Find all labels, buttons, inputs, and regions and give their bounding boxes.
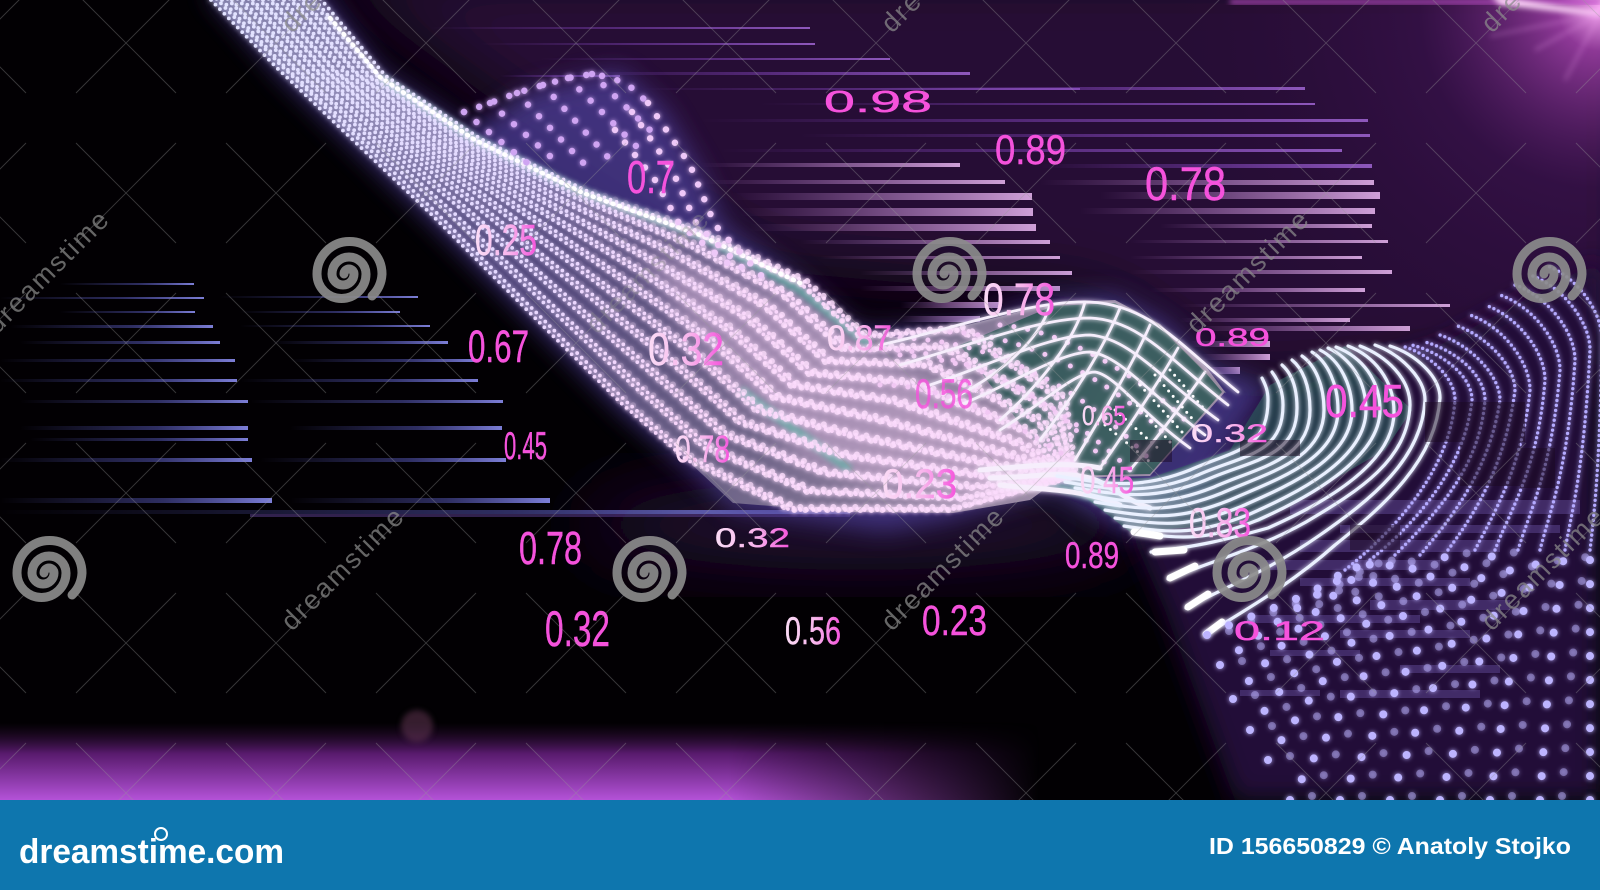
footer banner bbox=[0, 800, 1600, 890]
purple haze upper right bbox=[300, 0, 1600, 400]
ribbon upper edge bright line bbox=[330, 18, 800, 283]
value 0.65 faint: 0.65 bbox=[1082, 400, 1126, 431]
ribbon teal edge bbox=[380, 78, 1120, 505]
value 0.89 small: 0.89 bbox=[1195, 324, 1270, 352]
bottom purple glow bbox=[0, 710, 1040, 800]
value 0.32 under ribbon: 0.32 bbox=[715, 523, 790, 553]
value 0.83: 0.83 bbox=[1189, 499, 1251, 546]
right fan solid arcs bbox=[1057, 345, 1440, 635]
ribbon glow halo bbox=[205, 0, 1270, 535]
value 0.45 large: 0.45 bbox=[1325, 375, 1404, 427]
value 0.67: 0.67 bbox=[468, 321, 529, 372]
ribbon body fill bbox=[211, 0, 1225, 513]
value 0.87 on ribbon: 0.87 bbox=[827, 319, 892, 358]
value 0.78 lower: 0.78 bbox=[519, 522, 582, 574]
footer credit: ID 156650829 © Anatoly Stojko bbox=[1209, 833, 1571, 859]
right fan bright tips bbox=[1134, 532, 1222, 634]
data values bbox=[468, 84, 1404, 657]
value 0.23 lower: 0.23 bbox=[922, 597, 987, 645]
value 0.7: 0.7 bbox=[627, 151, 675, 203]
mesh small white dots bbox=[1105, 370, 1205, 462]
mesh wave pink dotted lines bbox=[870, 325, 1190, 472]
value 0.89 lower: 0.89 bbox=[1065, 535, 1119, 576]
value 0.32 right: 0.32 bbox=[1191, 420, 1268, 448]
purple haze beneath ribbon bbox=[580, 480, 1140, 570]
watermark text bbox=[0, 0, 1600, 636]
footer logo: dreamstime.com bbox=[19, 833, 284, 871]
value 0.32 middle: 0.32 bbox=[648, 323, 724, 375]
watermark text: dreamstime bbox=[275, 502, 409, 636]
right fan upper fine lines bbox=[1345, 265, 1600, 570]
dotted upper lobe bbox=[464, 74, 770, 285]
ribbon dotted strands bbox=[211, 0, 1076, 510]
watermark text: dreamstime bbox=[1180, 205, 1314, 339]
upper right data bars bbox=[430, 27, 1450, 374]
mesh teal tone bbox=[960, 303, 1222, 476]
fan teal tone bbox=[1060, 346, 1412, 532]
left blue data bars bbox=[0, 283, 850, 517]
ribbon bright central dots bbox=[574, 180, 1081, 516]
value 0.78 top: 0.78 bbox=[1145, 157, 1226, 210]
watermark spirals bbox=[17, 242, 1582, 598]
dark field behind right fan bbox=[1130, 260, 1600, 800]
value 0.23 on ribbon: 0.23 bbox=[882, 460, 957, 507]
lens flare top right bbox=[1100, 0, 1600, 420]
value 0.56 lower: 0.56 bbox=[785, 610, 841, 653]
ribbon central bright core bbox=[640, 250, 1080, 490]
value 0.45 left: 0.45 bbox=[504, 425, 547, 468]
watermark text: dreamstime bbox=[875, 502, 1009, 636]
value 0.12: 0.12 bbox=[1234, 616, 1325, 646]
value 0.78 on ribbon: 0.78 bbox=[675, 429, 730, 471]
value 0.98: 0.98 bbox=[824, 84, 932, 119]
value 0.25: 0.25 bbox=[475, 216, 537, 265]
value 0.32 lower: 0.32 bbox=[545, 601, 610, 657]
glitch dark blocks over fan bbox=[1130, 402, 1555, 550]
glitch bars in lower right bbox=[1240, 500, 1580, 698]
value 0.56 on ribbon: 0.56 bbox=[915, 370, 973, 417]
value 0.45 faint: 0.45 bbox=[1080, 460, 1134, 502]
value 0.89 top: 0.89 bbox=[995, 126, 1066, 173]
footer logo spiral bbox=[155, 828, 167, 840]
watermark text: dreamstime bbox=[580, 205, 714, 339]
right fan lower dot rows bbox=[1207, 546, 1600, 800]
mesh wave white wires bbox=[880, 302, 1238, 508]
value 0.78 middle: 0.78 bbox=[983, 274, 1055, 325]
